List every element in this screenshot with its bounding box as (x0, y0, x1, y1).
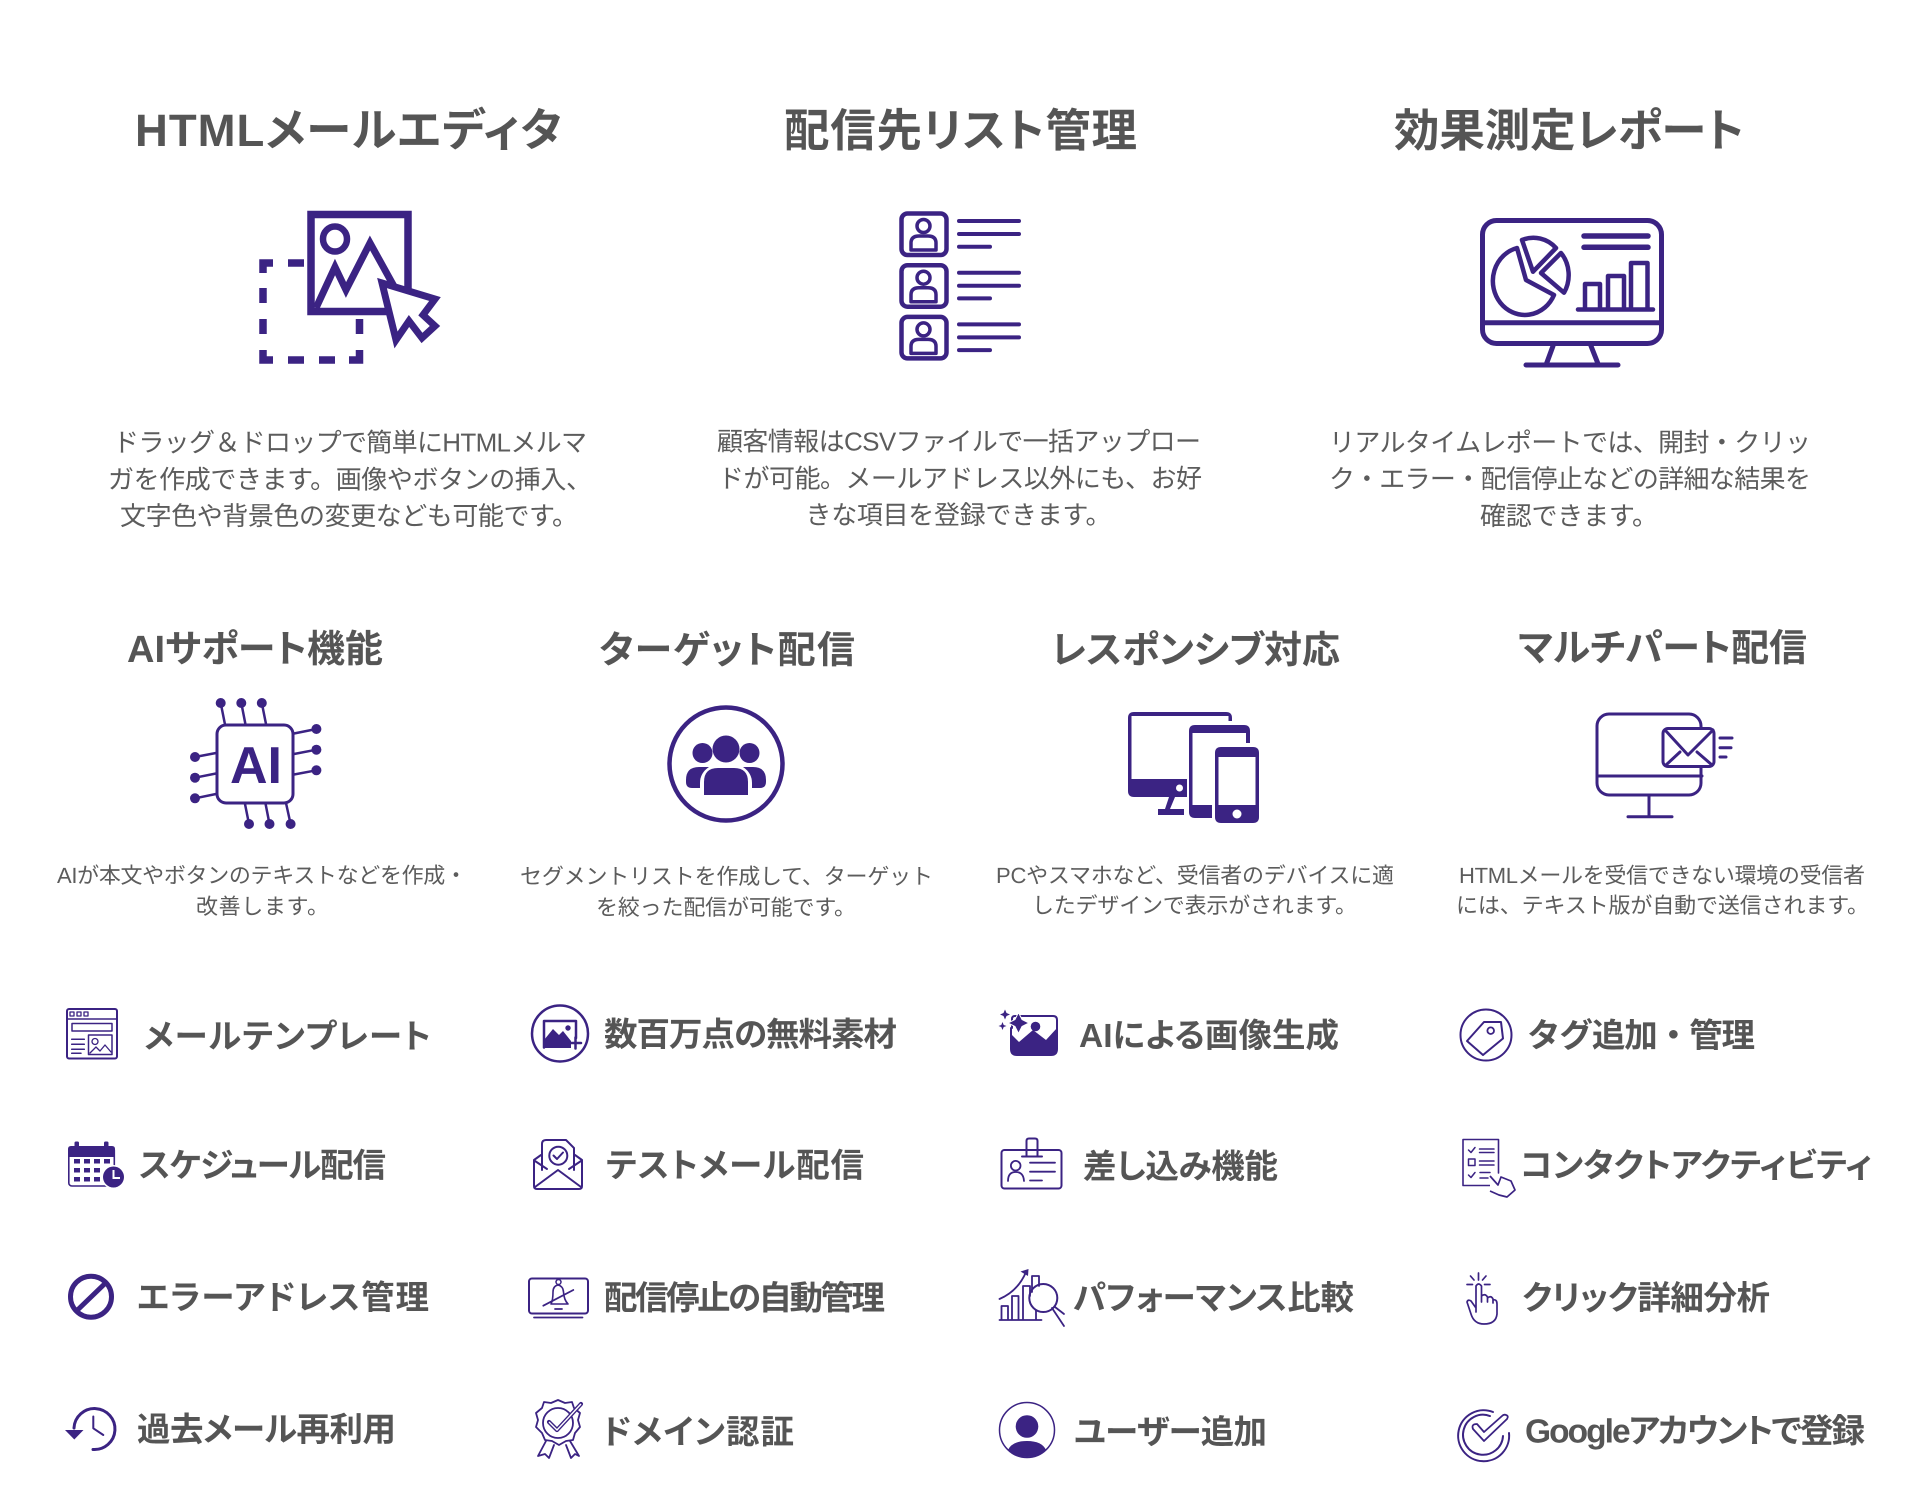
label: エラーアドレス管理 (137, 1280, 429, 1317)
icon: user in circle (1000, 1402, 1054, 1458)
description: responsive (996, 863, 1394, 918)
description: reports (1329, 428, 1811, 531)
panel: multipart (1456, 628, 1869, 918)
icon: group in circle (670, 708, 782, 820)
icon: muted bell on laptop (529, 1278, 588, 1318)
panel: list management (717, 106, 1202, 530)
description: targeted delivery: セグメントリストを作成して、ターゲット (520, 864, 933, 889)
description: multipart: HTMLメールを受信できない環境の受信者 (1459, 863, 1865, 888)
feature: click analysis (1467, 1273, 1770, 1324)
icon: contact list (902, 214, 1019, 358)
label: 配信停止の自動管理 (604, 1280, 885, 1318)
heading: list management: 配信先リスト管理 (784, 106, 1137, 156)
icon: devices (1128, 712, 1259, 823)
icon: envelope with check (534, 1140, 582, 1189)
feature: add users (1000, 1402, 1267, 1458)
feature: error addresses (70, 1276, 429, 1317)
feature: contact activity (1463, 1140, 1872, 1197)
description: list management: 顧客情報はCSVファイルで一括アップロー (717, 426, 1201, 456)
panel: responsive (996, 630, 1394, 918)
label: メールテンプレート (144, 1019, 431, 1056)
feature: AI image generation (998, 1010, 1339, 1055)
label: ドメイン認証 (602, 1414, 794, 1452)
panel: reports (1329, 106, 1811, 531)
icon: checklist with hand (1463, 1140, 1515, 1197)
panel: targeted delivery (520, 630, 933, 920)
heading: HTML mail editor: HTMLメールエディタ (135, 105, 562, 156)
description: list management: ドが可能。メールアドレス以外にも、お好 (718, 464, 1202, 494)
feature: free stock images (532, 1006, 897, 1062)
icon: template (67, 1009, 117, 1058)
heading: multipart: マルチパート配信 (1518, 628, 1807, 670)
icon: tag in circle (1460, 1010, 1512, 1060)
feature: mail templates (67, 1009, 431, 1058)
label: パフォーマンス比較 (1073, 1280, 1354, 1318)
description: HTML mail editor: ドラッグ＆ドロップで簡単にHTMLメルマ (113, 428, 587, 458)
feature: reuse past emails (65, 1409, 396, 1450)
description: list management: きな項目を登録できます。 (806, 500, 1112, 530)
feature: merge tags (1002, 1138, 1278, 1188)
feature: test mail (534, 1140, 864, 1189)
description: AI support: 改善します。 (196, 894, 329, 919)
feature: tags (1460, 1010, 1755, 1060)
heading: responsive: レスポンシブ対応 (1051, 630, 1340, 672)
icon: calendar with clock (68, 1142, 126, 1189)
description: AI support: AIが本文やボタンのテキストなどを作成・ (57, 863, 467, 888)
heading: targeted delivery: ターゲット配信 (599, 630, 855, 672)
description: list management (717, 426, 1202, 530)
icon: monitor with envelope (1597, 714, 1732, 817)
feature: schedule (68, 1142, 386, 1189)
description: reports: ク・エラー・配信停止などの詳細な結果を (1329, 464, 1811, 494)
label: コンタクトアクティビティ (1520, 1148, 1872, 1185)
icon: drag and drop image (263, 214, 435, 360)
description: reports: リアルタイムレポートでは、開封・クリッ (1329, 428, 1811, 458)
description: HTML mail editor: 文字色や背景色の変更なども可能です。 (120, 501, 578, 531)
heading: AI support: AIサポート機能 (127, 629, 383, 671)
icon: AI chip (190, 698, 321, 829)
label: スケジュール配信 (139, 1148, 386, 1185)
description: HTML mail editor: ガを作成できます。画像やボタンの挿入、 (108, 464, 592, 494)
description: multipart: には、テキスト版が自動で送信されます。 (1456, 893, 1869, 918)
description: targeted delivery (520, 864, 933, 920)
description: responsive: したデザインで表示がされます。 (1032, 893, 1357, 918)
icon: monitor with charts (1482, 220, 1662, 365)
label: 過去メール再利用 (137, 1412, 396, 1449)
description: AI support (57, 863, 467, 919)
description: targeted delivery: を絞った配信が可能です。 (596, 895, 856, 920)
icon: ID card (1002, 1138, 1062, 1188)
description: HTML mail editor (108, 428, 592, 531)
description: multipart (1456, 863, 1869, 918)
label: ユーザー追加 (1074, 1414, 1267, 1452)
icon: double ring check (1458, 1410, 1509, 1461)
feature: unsubscribe management (529, 1278, 885, 1318)
icon: image plus in circle (532, 1006, 588, 1062)
feature: domain authentication (536, 1400, 794, 1458)
label: テストメール配信 (606, 1148, 864, 1185)
description: responsive: PCやスマホなど、受信者のデバイスに適 (996, 863, 1394, 888)
panel: AI support (57, 629, 467, 919)
description: reports: 確認できます。 (1480, 501, 1658, 531)
icon: chart with magnifier (1000, 1269, 1064, 1326)
heading: reports: 効果測定レポート (1394, 106, 1744, 156)
label: AIによる画像生成 (1079, 1018, 1339, 1055)
panel: HTML mail editor (108, 105, 592, 531)
icon: sparkles and image (998, 1010, 1057, 1055)
icon: history clock (65, 1409, 115, 1450)
feature: Google sign-up (1458, 1410, 1866, 1461)
icon: award badge with check (536, 1400, 581, 1458)
feature: performance comparison (1000, 1269, 1354, 1326)
icon: prohibition sign (70, 1276, 112, 1317)
label: Googleアカウントで登録 (1525, 1414, 1866, 1450)
icon: AI chip: AI (230, 737, 282, 795)
icon: tapping hand (1467, 1273, 1497, 1324)
label: タグ追加・管理 (1527, 1018, 1755, 1055)
label: 差し込み機能 (1083, 1149, 1278, 1186)
label: クリック詳細分析 (1522, 1280, 1770, 1318)
label: 数百万点の無料素材 (604, 1017, 897, 1054)
